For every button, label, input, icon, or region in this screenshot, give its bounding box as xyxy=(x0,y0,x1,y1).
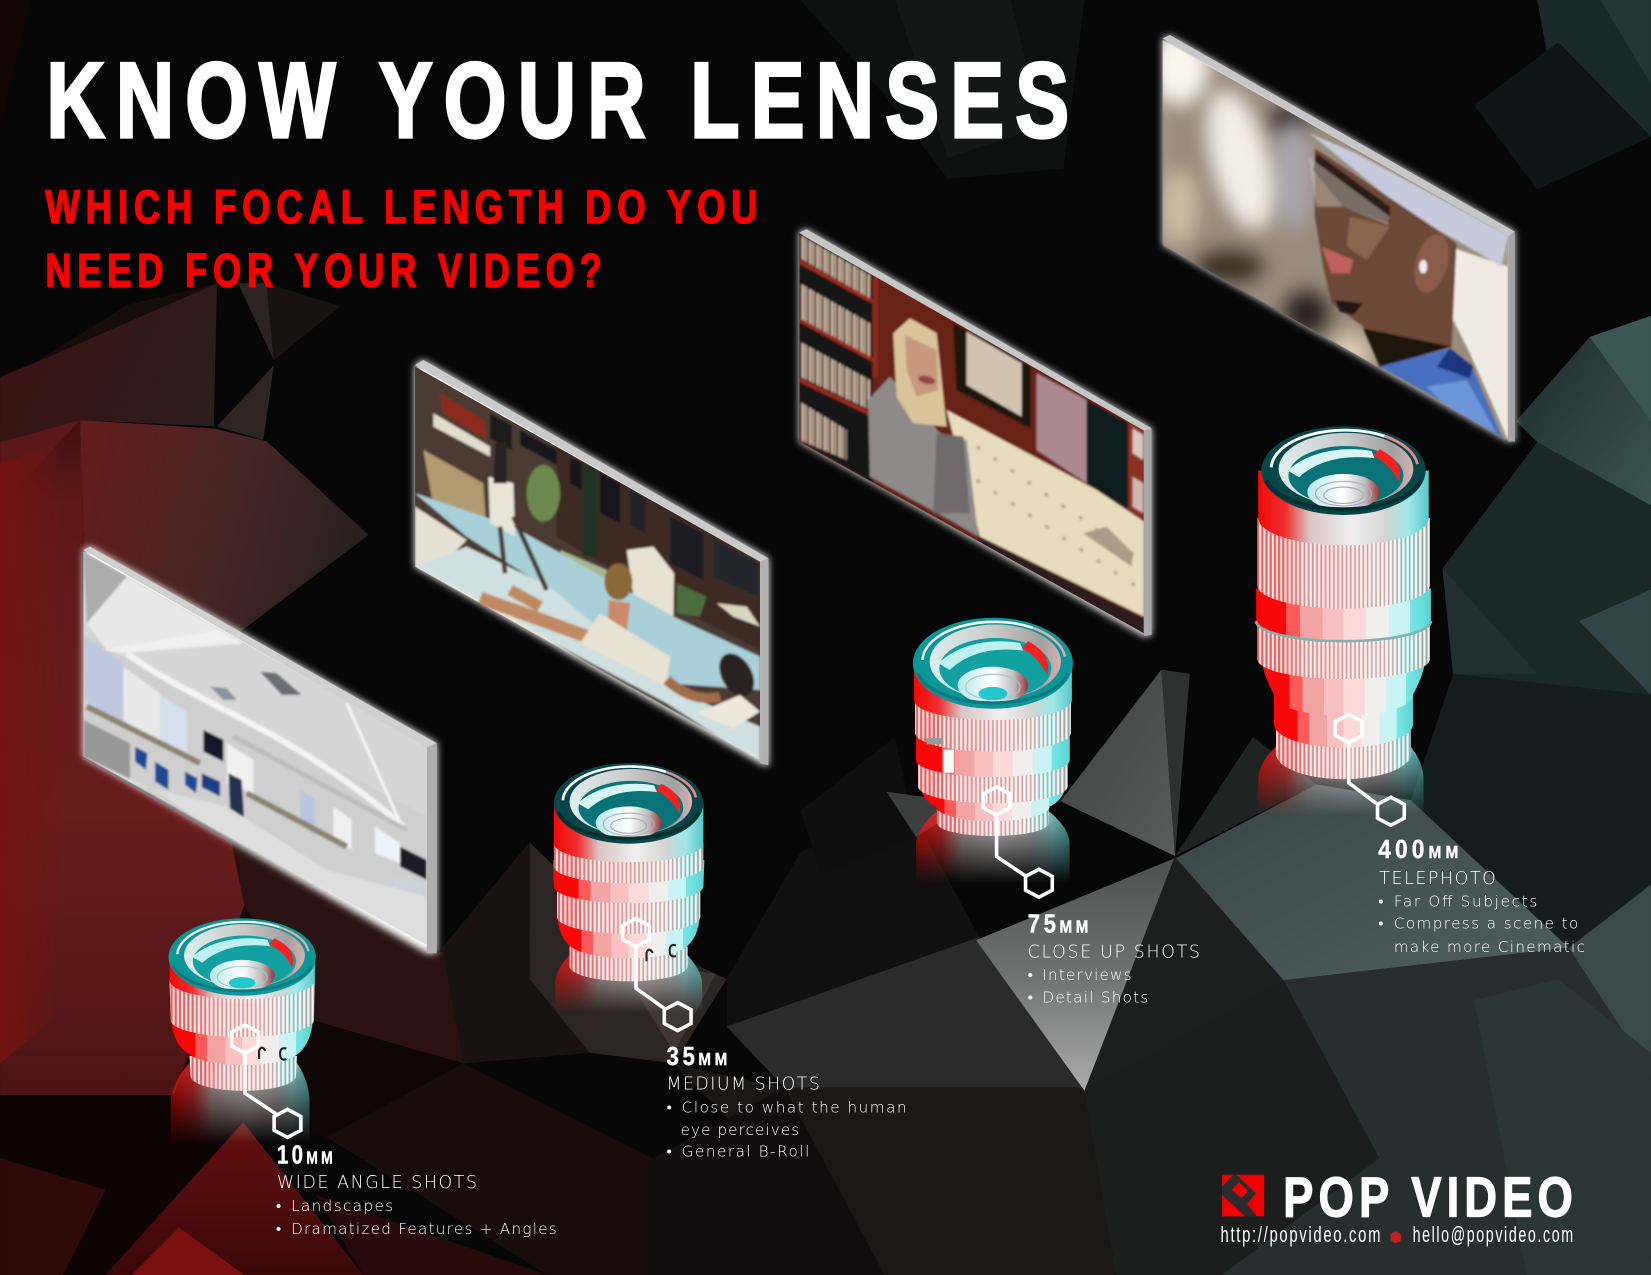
text block: 35mm: eye perceives xyxy=(681,1121,799,1139)
text block: 35mm: General B-Roll xyxy=(682,1143,809,1161)
callout: 75mm leader xyxy=(983,787,1052,897)
text block: 35mm: • xyxy=(667,1099,672,1117)
text block: 75mm: • xyxy=(1028,966,1033,984)
logo: POP VIDEO xyxy=(1221,1166,1578,1247)
text block: 10mm: WIDE ANGLE SHOTS xyxy=(277,1173,477,1193)
logo: POP VIDEO: http://popvideo.com xyxy=(1221,1222,1382,1247)
text block: 35mm: 35MM xyxy=(667,1041,731,1071)
icon: red P mark xyxy=(1222,1175,1264,1216)
lens: 35mm xyxy=(553,763,704,1013)
callout: 35mm leader xyxy=(623,919,691,1031)
subtitle: NEED FOR YOUR VIDEO? xyxy=(45,244,608,296)
title: KNOW YOUR LENSES xyxy=(46,41,1080,160)
text block: 35mm xyxy=(667,1041,907,1161)
text block: 10mm: Dramatized Features + Angles xyxy=(291,1220,557,1238)
text block: 10mm: • xyxy=(276,1197,281,1215)
lens: 400mm xyxy=(1256,426,1431,816)
subtitle xyxy=(45,181,763,296)
callout: 400mm leader xyxy=(1335,715,1404,825)
panel: 400mm close-up photo xyxy=(1153,30,1515,443)
text block: 35mm: • xyxy=(667,1143,672,1161)
subtitle: WHICH FOCAL LENGTH DO YOU xyxy=(45,181,763,233)
panel: 75mm interview photo xyxy=(797,229,1152,637)
logo: POP VIDEO: POP VIDEO xyxy=(1283,1166,1578,1229)
text block: 75mm: CLOSE UP SHOTS xyxy=(1028,943,1200,963)
text block: 75mm: 75MM xyxy=(1028,909,1092,939)
panel: 35mm poolside photo xyxy=(413,360,768,767)
text block: 10mm: Landscapes xyxy=(291,1197,393,1215)
text block: 400mm: • xyxy=(1378,893,1384,911)
text block: 400mm: make more Cinematic xyxy=(1394,938,1585,956)
text block: 10mm: • xyxy=(276,1220,281,1238)
callout: 10mm leader xyxy=(232,1025,301,1137)
panel: 10mm office photo xyxy=(80,547,437,953)
lens: 10mm xyxy=(169,918,316,1143)
text block: 10mm: 10MM xyxy=(277,1139,336,1169)
text block: 75mm: • xyxy=(1028,988,1033,1006)
text block: 400mm: 400MM xyxy=(1378,834,1462,864)
text block: 75mm: Interviews xyxy=(1042,966,1132,984)
text block: 75mm: Detail Shots xyxy=(1042,988,1148,1006)
text block: 400mm: Compress a scene to xyxy=(1394,915,1578,933)
text block: 35mm: MEDIUM SHOTS xyxy=(667,1074,820,1094)
text block: 400mm: TELEPHOTO xyxy=(1379,869,1496,889)
text block: 75mm xyxy=(1028,909,1200,1006)
lens: 75mm xyxy=(913,618,1073,883)
text block: 400mm: Far Off Subjects xyxy=(1394,893,1537,911)
text block: 35mm: Close to what the human xyxy=(682,1099,907,1117)
text block: 10mm xyxy=(276,1139,557,1238)
text block: 400mm xyxy=(1378,834,1585,956)
text block: 400mm: • xyxy=(1378,915,1384,933)
